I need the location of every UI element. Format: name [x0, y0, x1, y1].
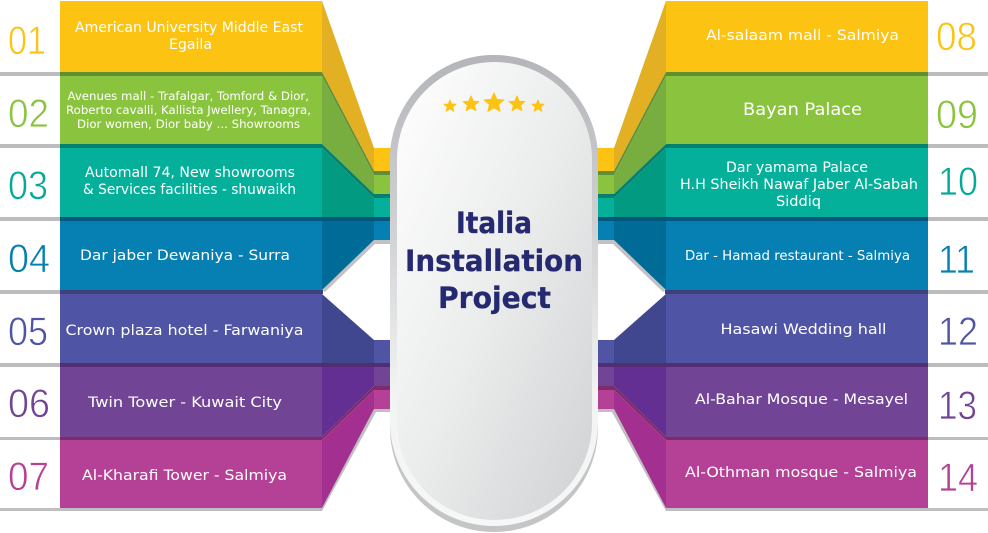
green ribbon — [597, 72, 988, 194]
row 05 left: indigo band — [0, 290, 391, 367]
label 02: Roberto cavalli, Kallista Jwellery, Tanagra, — [66, 103, 311, 117]
number 08: 08 — [936, 15, 977, 59]
label 01 — [75, 20, 303, 53]
number 11: 11 — [938, 238, 975, 282]
number 01: 01 — [8, 19, 46, 63]
label 02 — [66, 89, 311, 131]
label 03: Automall 74, New showrooms — [85, 165, 295, 181]
purple ribbon — [0, 363, 391, 440]
icon: five stars — [444, 93, 544, 111]
blue ribbon — [597, 217, 988, 294]
title: Installation — [405, 244, 583, 278]
label 04: Dar jaber Dewaniya - Surra — [80, 248, 290, 264]
label 10: Dar yamama Palace — [726, 160, 868, 176]
row 06 left: purple band — [0, 363, 391, 440]
blue ribbon — [0, 217, 391, 294]
magenta ribbon — [597, 386, 988, 511]
row 12 right: indigo band — [597, 290, 988, 367]
label 08: Al-salaam mall - Salmiya — [706, 28, 899, 44]
label 02: Avenues mall - Trafalgar, Tomford & Dior, — [68, 89, 309, 103]
title — [405, 206, 583, 315]
purple ribbon — [597, 363, 988, 440]
label 06: Twin Tower - Kuwait City — [87, 395, 282, 411]
central pill panel — [390, 55, 598, 532]
row 01 left: yellow band — [0, 1, 391, 171]
label 10: Siddiq — [776, 194, 821, 210]
label 11: Dar - Hamad restaurant - Salmiya — [685, 249, 910, 264]
number 09: 09 — [936, 93, 978, 137]
label 05: Crown plaza hotel - Farwaniya — [66, 323, 304, 339]
yellow ribbon — [597, 1, 988, 171]
label 07: Al-Kharafi Tower - Salmiya — [82, 468, 287, 484]
green ribbon — [0, 72, 391, 194]
row 11 right: blue band — [597, 217, 988, 294]
row 14 right: magenta band — [597, 386, 988, 511]
number 13: 13 — [938, 384, 977, 428]
label 12: Hasawi Wedding hall — [720, 322, 886, 338]
label 03 — [83, 165, 296, 198]
row 02 left: green band — [0, 72, 391, 194]
yellow ribbon — [0, 1, 391, 171]
magenta ribbon — [0, 386, 391, 511]
number 05: 05 — [8, 310, 48, 354]
number 03: 03 — [8, 164, 48, 208]
row 08 right: yellow band — [597, 1, 988, 171]
row 04 left: blue band — [0, 217, 391, 294]
number 04: 04 — [8, 237, 50, 281]
label 03: & Services facilities - shuwaikh — [83, 182, 296, 198]
indigo ribbon — [597, 290, 988, 367]
number 12: 12 — [938, 310, 978, 354]
number 06: 06 — [8, 382, 50, 426]
label 09: Bayan Palace — [743, 100, 862, 119]
teal ribbon — [597, 144, 988, 221]
teal ribbon — [0, 144, 391, 221]
number 02: 02 — [8, 92, 49, 136]
row 03 left: teal band — [0, 144, 391, 221]
label 02: Dior women, Dior baby ... Showrooms — [77, 117, 300, 131]
title: Italia — [456, 206, 532, 240]
label 01: American University Middle East — [75, 20, 303, 36]
number 07: 07 — [8, 455, 49, 499]
label 10 — [680, 160, 918, 210]
indigo ribbon — [0, 290, 391, 367]
label 13: Al-Bahar Mosque - Mesayel — [695, 392, 908, 408]
title: Project — [438, 281, 551, 315]
label 10: H.H Sheikh Nawaf Jaber Al-Sabah — [680, 177, 918, 193]
number 10: 10 — [938, 160, 978, 204]
number 14: 14 — [938, 456, 978, 500]
row 13 right: purple band — [597, 363, 988, 440]
row 07 left: magenta band — [0, 386, 391, 511]
label 14: Al-Othman mosque - Salmiya — [685, 465, 917, 481]
row 09 right: green band — [597, 72, 988, 194]
row 10 right: teal band — [597, 144, 988, 221]
label 01: Egaila — [169, 37, 212, 53]
